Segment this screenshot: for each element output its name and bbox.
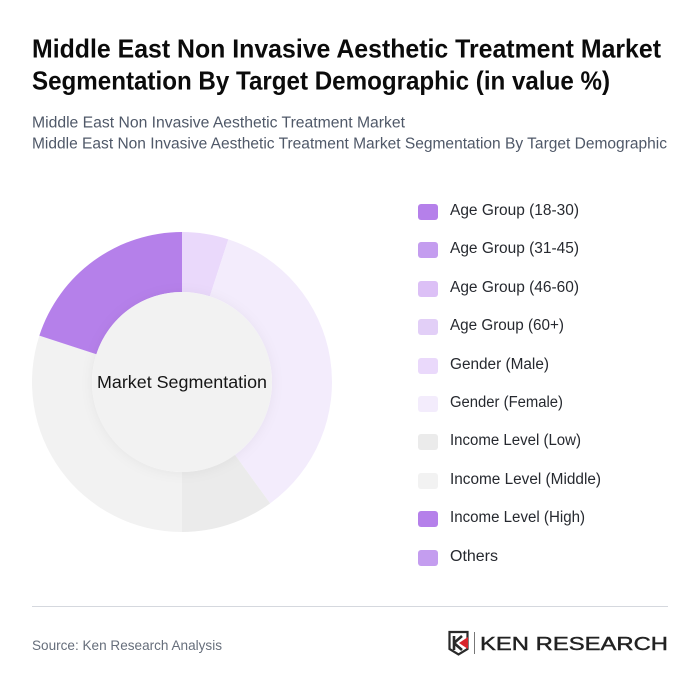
legend item: Age Group (60+): Age Group (60+)	[450, 317, 564, 334]
source note: Source: Ken Research Analysis	[32, 637, 222, 653]
segment: Income Level (High)	[39, 232, 182, 354]
title: Segmentation By Target Demographic (in value %)	[32, 66, 610, 96]
legend item: Others: Others	[450, 548, 498, 565]
title	[32, 34, 661, 96]
segment: Gender (Male)	[182, 232, 228, 296]
subtitle	[32, 114, 667, 152]
legend item: Age Group (18-30): Age Group (18-30)	[450, 202, 579, 219]
subtitle: Middle East Non Invasive Aesthetic Treatment Market Segmentation By Target Demographic	[32, 136, 667, 152]
legend item: Income Level (Middle): Income Level (Middle)	[450, 471, 601, 488]
centre label: Market Segmentation	[97, 372, 267, 392]
logo wordmark: KEN RESEARCH	[480, 634, 668, 654]
icon: shield	[450, 632, 468, 654]
donut chart	[32, 232, 332, 532]
subtitle: Middle East Non Invasive Aesthetic Treatment Market	[32, 114, 406, 132]
legend item: Income Level (High): Income Level (High)	[450, 509, 585, 526]
donut centre	[92, 292, 272, 472]
legend	[418, 202, 601, 566]
title: Middle East Non Invasive Aesthetic Treatment Market	[32, 34, 661, 64]
legend item: Age Group (31-45): Age Group (31-45)	[450, 240, 579, 257]
segment: Income Level (Middle)	[32, 336, 182, 532]
legend item: Age Group (46-60): Age Group (46-60)	[450, 279, 579, 296]
legend item: Others	[418, 548, 498, 566]
segment: Income Level (Low)	[182, 455, 270, 532]
logo: Ken Research	[450, 632, 668, 654]
legend item: Income Level (Low): Income Level (Low)	[450, 432, 581, 449]
legend item: Gender (Female): Gender (Female)	[450, 394, 563, 411]
legend item: Gender (Male): Gender (Male)	[450, 356, 549, 373]
segment: Gender (Female)	[210, 239, 332, 503]
